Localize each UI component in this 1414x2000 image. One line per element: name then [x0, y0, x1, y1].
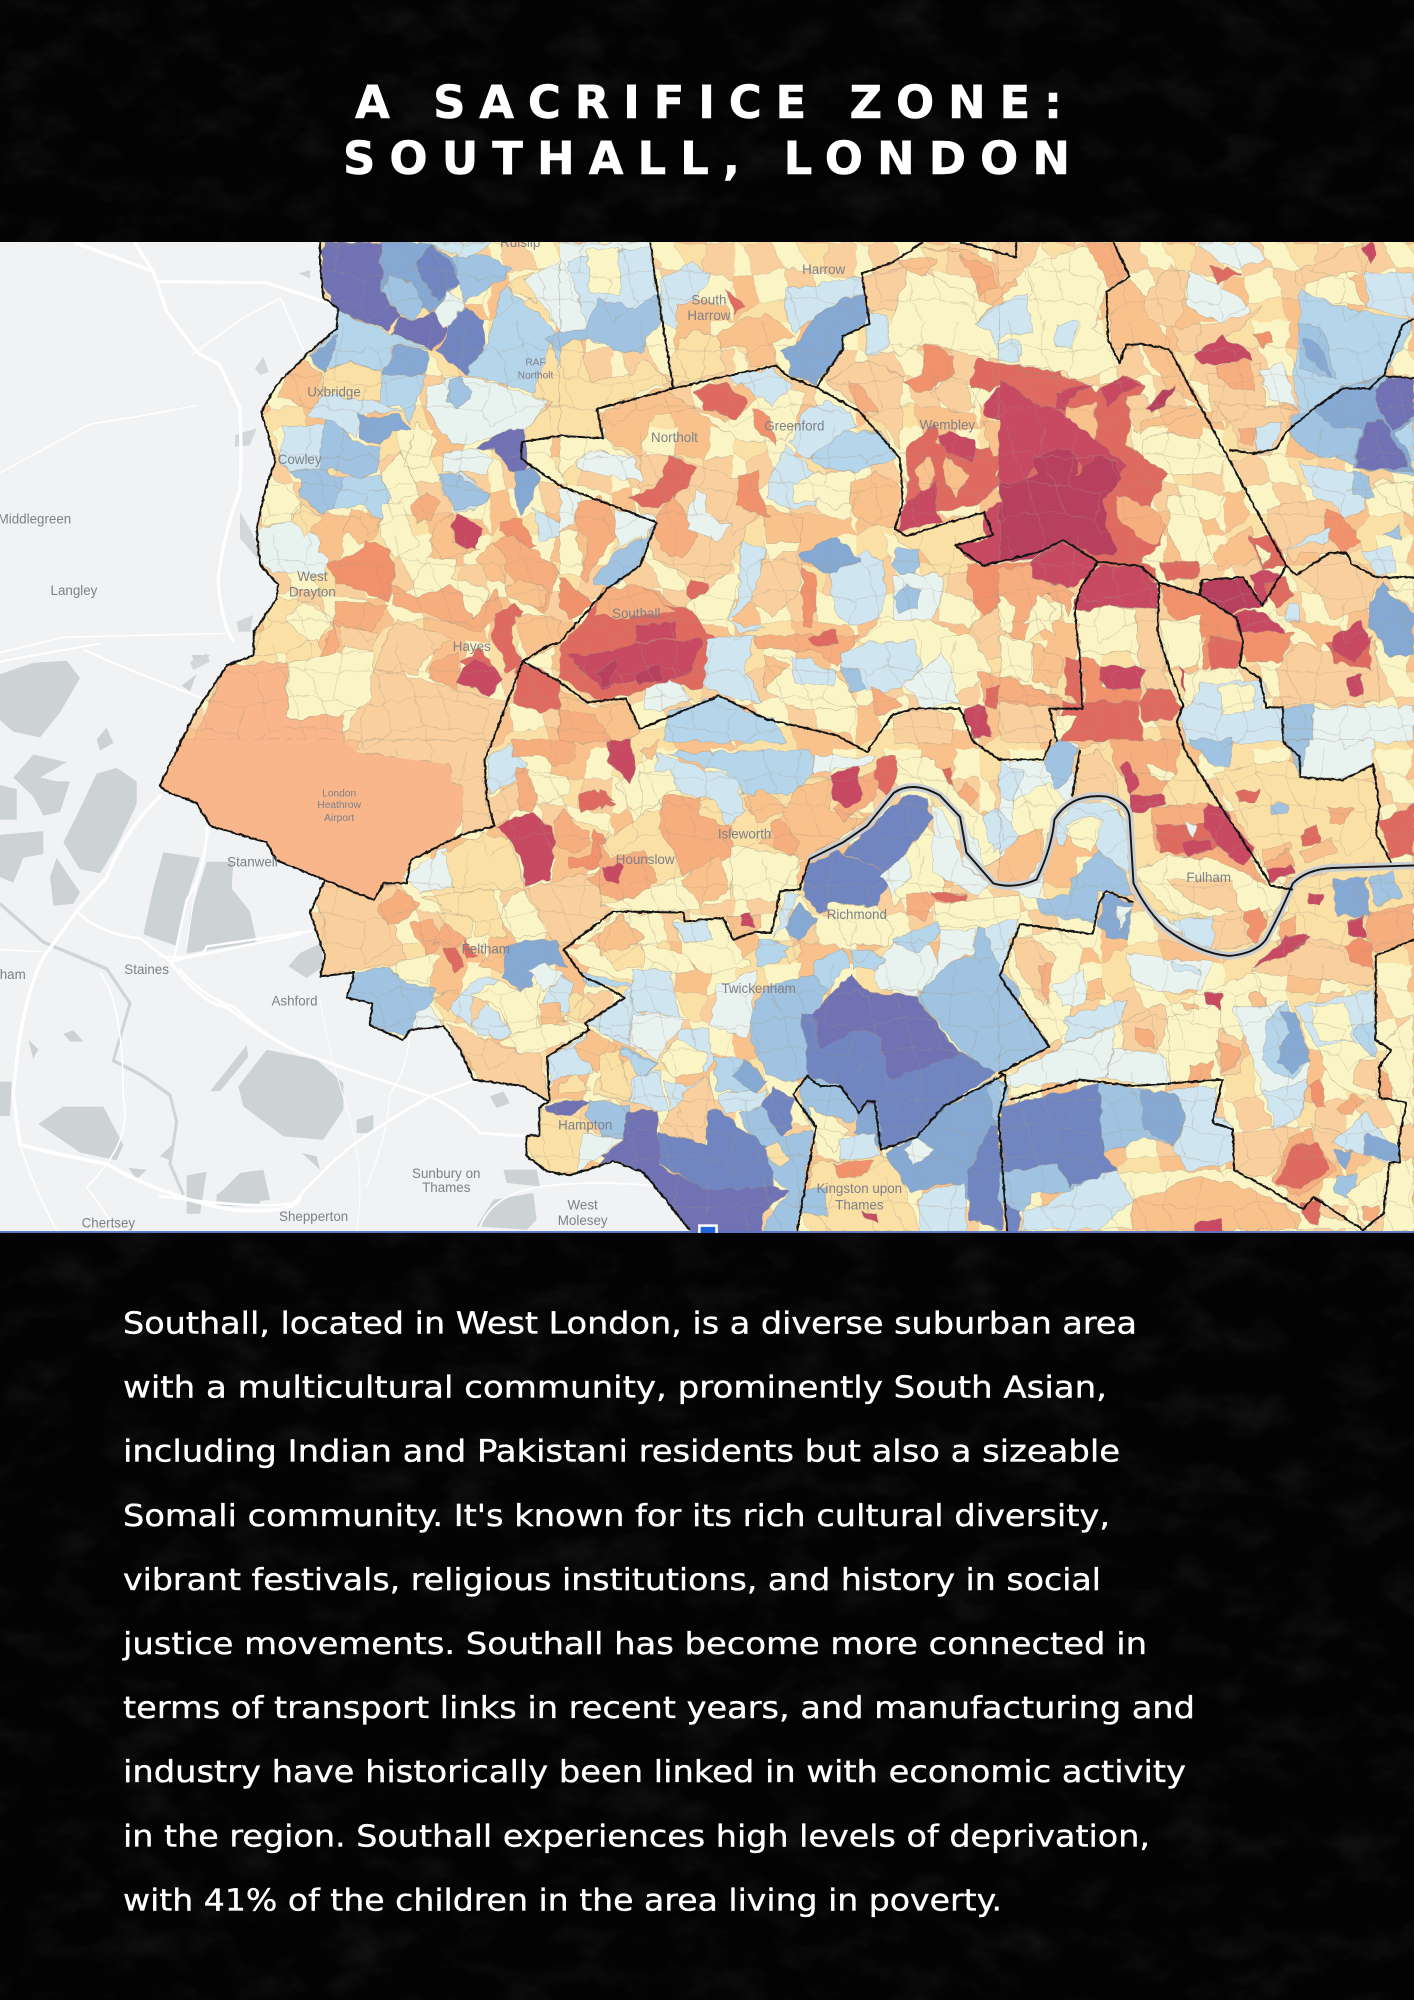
map bottom edge marker — [0, 1224, 1414, 1233]
map place labels: Cowley — [278, 452, 322, 467]
basemap: ponds north-west — [190, 270, 310, 670]
body paragraph: Somali community. It's known for its rich cultural diversity, — [123, 1499, 1110, 1534]
map place labels: Northolt — [651, 430, 698, 445]
body paragraph: industry have historically been linked in with economic activity — [123, 1755, 1186, 1790]
map place labels: South — [691, 292, 726, 307]
body paragraph — [122, 1306, 1195, 1918]
map place labels: Thames — [835, 1198, 884, 1213]
map place labels: Shepperton — [279, 1209, 348, 1224]
map place labels: Ashford — [271, 994, 318, 1009]
map place labels — [0, 235, 1231, 1231]
map place labels: RAF — [525, 358, 546, 369]
title — [343, 76, 1070, 185]
choropleth: underlay of mixed pale cells — [140, 223, 1414, 1256]
map place labels: Drayton — [289, 584, 336, 599]
basemap: roads — [0, 243, 660, 1237]
map place labels: Southall — [612, 606, 660, 621]
map place labels: Twickenham — [721, 981, 796, 996]
body paragraph: Southall, located in West London, is a diverse suburban area — [123, 1306, 1137, 1342]
title: A SACRIFICE ZONE: — [355, 76, 1062, 129]
map place labels: Langley — [51, 583, 98, 598]
map place labels: Stanwell — [227, 855, 278, 870]
map place labels: Feltham — [462, 941, 510, 956]
body paragraph: terms of transport links in recent years, and manufacturing and — [123, 1691, 1195, 1726]
body paragraph: with a multicultural community, prominently South Asian, — [123, 1371, 1107, 1406]
body paragraph: with 41% of the children in the area living in poverty. — [123, 1883, 1002, 1918]
choropleth: Heathrow, Hounslow, Feltham, Hampton — [160, 740, 660, 1196]
basemap: reservoirs east of Staines — [217, 943, 540, 1230]
map place labels: Greenford — [764, 419, 824, 434]
map place labels: London — [322, 789, 356, 800]
body paragraph: vibrant festivals, religious institutions, and history in social — [123, 1563, 1101, 1598]
map place labels: Wembley — [920, 417, 975, 432]
choropleth: mosaic of small neighbourhood cells — [153, 229, 1414, 1249]
map: deprivation choropleth of west London — [0, 242, 1414, 1233]
river Thames boundary — [810, 787, 1414, 956]
choropleth: Brent east, Ealing east, Hammersmith, north-east corner — [1000, 242, 1414, 742]
map place labels: Northolt — [518, 370, 554, 381]
basemap: grey land — [0, 242, 1414, 1234]
map place labels: West — [568, 1198, 598, 1213]
choropleth: Harrow, Northolt, Greenford, Southall, Wembley — [560, 242, 1060, 742]
map place labels: Fulham — [1186, 870, 1231, 885]
map place labels: Sunbury on — [412, 1166, 480, 1181]
map place labels: Heathrow — [317, 800, 362, 811]
choropleth: Isleworth, Richmond, Twickenham, Kingston — [600, 740, 1020, 1233]
choropleth: Hillingdon, Uxbridge and Hayes — [193, 242, 560, 742]
map place labels: Uxbridge — [307, 384, 361, 399]
map place labels: Hayes — [453, 639, 491, 654]
body paragraph: justice movements. Southall has become more connected in — [122, 1627, 1147, 1662]
map place labels: Thames — [422, 1180, 471, 1195]
body paragraph: including Indian and Pakistani residents but also a sizeable — [123, 1435, 1120, 1470]
map place labels: Richmond — [827, 907, 887, 922]
choropleth: Fulham, Wandsworth, Wimbledon, Lambeth edge — [1000, 740, 1414, 1233]
map place labels: Hampton — [558, 1117, 612, 1132]
body paragraph: in the region. Southall experiences high levels of deprivation, — [123, 1819, 1150, 1854]
title: SOUTHALL, LONDON — [343, 132, 1070, 185]
map place labels: West — [297, 569, 328, 584]
basemap: reservoirs, ponds and river Colne — [0, 655, 260, 1214]
map place labels: ham — [0, 967, 26, 982]
river Thames halo — [810, 787, 1414, 956]
borough boundaries — [159, 242, 1414, 1233]
map place labels: Kingston upon — [817, 1181, 902, 1196]
map place labels: Isleworth — [718, 827, 771, 842]
map place labels: Staines — [124, 962, 169, 977]
map place labels: Chertsey — [82, 1216, 135, 1231]
map place labels: Harrow — [802, 262, 846, 277]
map place labels: Hounslow — [616, 852, 675, 867]
map place labels: Harrow — [687, 308, 731, 323]
map place labels: Airport — [324, 813, 354, 824]
choropleth: coloured neighbourhoods — [140, 223, 1414, 1256]
map place labels: Molesey — [558, 1213, 608, 1228]
choropleth: Heathrow smooth zone — [160, 740, 463, 900]
